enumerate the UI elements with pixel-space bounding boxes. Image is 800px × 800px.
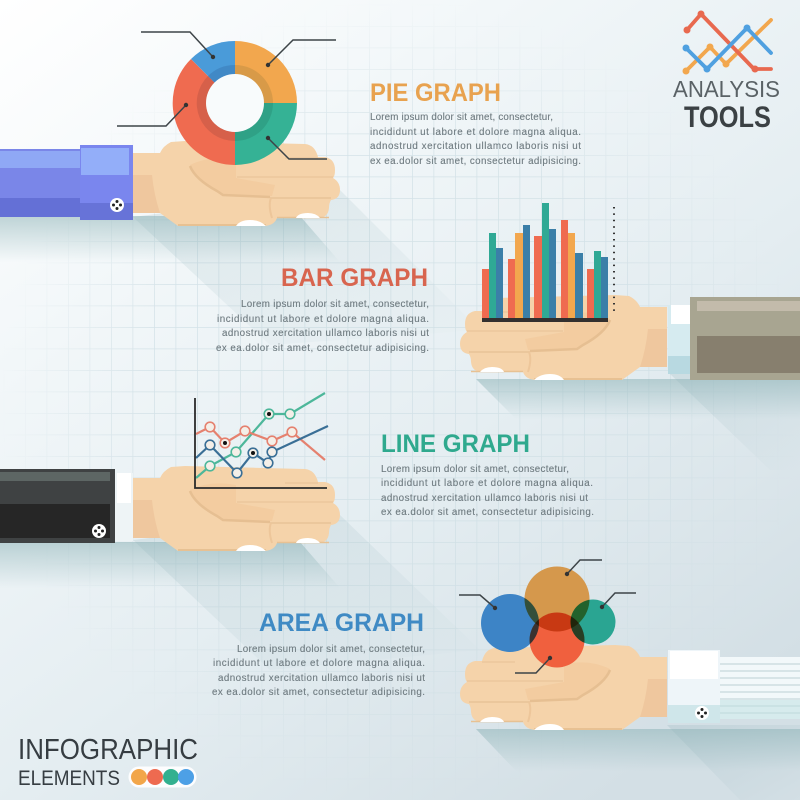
text block: pie graph: ex ea.dolor sit amet, consectetur adipisicing. [370,156,581,167]
logo: analysis tools [673,10,780,134]
donut leader lines [117,32,336,159]
logo text: analysis: ANALYSIS [673,76,780,102]
badge: infographic elements [18,734,198,790]
badge text: elements: ELEMENTS [18,767,120,790]
text block: area graph: adnostrud xercitation ullamco laboris nisi ut [218,673,425,684]
bar chart [482,203,614,322]
badge text: infographic: INFOGRAPHIC [18,734,198,766]
long shadows [0,190,800,800]
text block: area graph: incididunt ut labore et dolore magna aliqua. [213,658,425,669]
text block: line graph: ex ea.dolor sit amet, consectetur adipisicing. [381,507,594,518]
sleeve: white striped arm [668,650,800,723]
donut chart [173,41,297,165]
text block: pie graph [370,112,581,167]
heading: line graph: LINE GRAPH [381,430,530,458]
text block: bar graph: ex ea.dolor sit amet, consectetur adipisicing. [216,343,429,354]
icon: coloured dots [131,769,194,785]
text block: bar graph: incididunt ut labore et dolore magna aliqua. [217,314,429,325]
icon: hand [133,141,340,226]
text block: line graph: adnostrud xercitation ullamco laboris nisi ut [381,493,588,504]
logo text: tools: TOOLS [684,101,771,134]
heading: pie graph: PIE GRAPH [370,79,501,107]
text block: area graph: Lorem ipsum dolor sit amet, consectetur, [237,644,425,655]
text block: pie graph: Lorem ipsum dolor sit amet, consectetur, [370,112,553,123]
text block: bar graph [216,299,429,354]
text block: pie graph: incididunt ut labore et dolore magna aliqua. [370,127,581,138]
venn leader lines [459,560,636,673]
text block: line graph: Lorem ipsum dolor sit amet, consectetur, [381,464,569,475]
text block: bar graph: adnostrud xercitation ullamco laboris nisi ut [222,328,429,339]
icon: hand [460,295,667,380]
line chart [195,393,328,488]
sleeve: purple arm [0,145,133,220]
text block: area graph: ex ea.dolor sit amet, consectetur adipisicing. [212,687,425,698]
heading: area graph: AREA GRAPH [259,609,424,637]
panel: area graph [212,560,800,730]
venn diagram [481,566,616,668]
sleeve: khaki arm [668,297,800,380]
icon: line chart mark [682,10,771,74]
panel: pie graph [0,32,581,226]
heading: bar graph: BAR GRAPH [281,264,428,292]
sleeve: black arm [0,469,133,543]
text block: pie graph: adnostrud xercitation ullamco laboris nisi ut [370,141,581,152]
panel: line graph [0,393,594,551]
panel: bar graph [216,203,800,380]
text block: line graph: incididunt ut labore et dolore magna aliqua. [381,478,593,489]
text block: area graph [212,644,425,698]
icon: hand [460,645,667,730]
text block: bar graph: Lorem ipsum dolor sit amet, consectetur, [241,299,429,310]
icon: hand [133,466,340,551]
text block: line graph [381,464,594,518]
